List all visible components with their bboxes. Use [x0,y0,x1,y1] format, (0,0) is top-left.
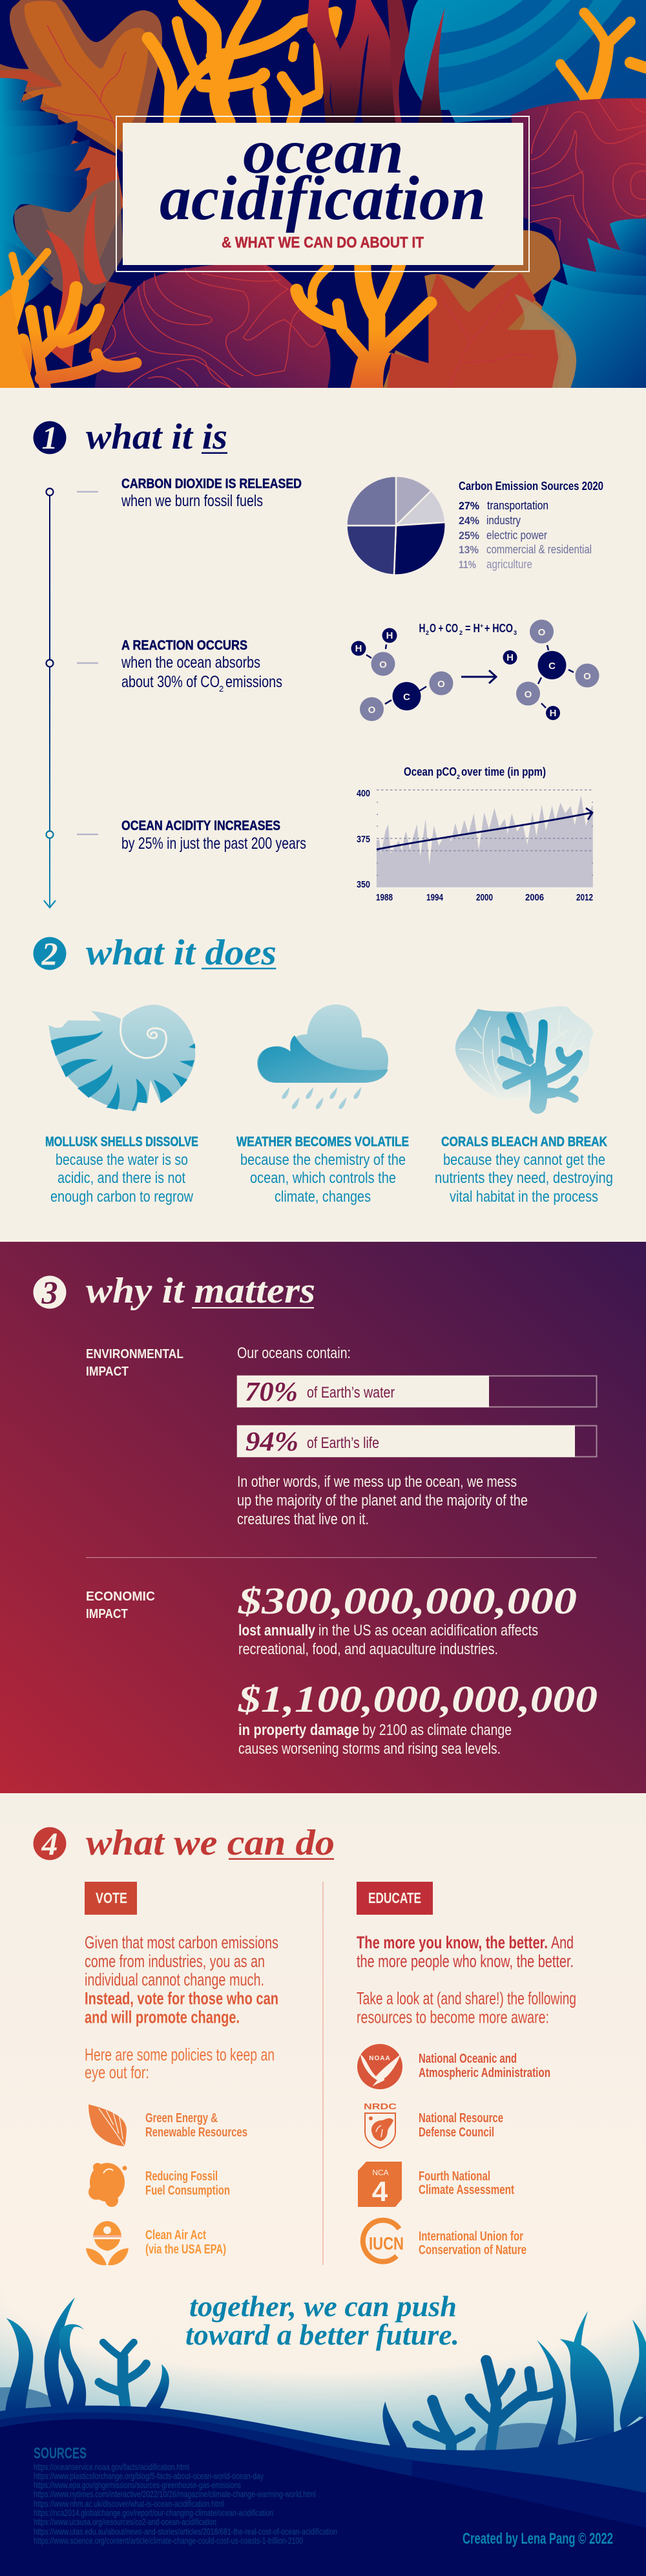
section 3 panel: why it matters [0,1242,646,1793]
bar: 70% of Earth's water: 70% [245,1378,298,1407]
resource: NCA: Fourth National [419,2169,490,2184]
vote paragraph: eye out for: [85,2063,149,2082]
molecules diagram: O [538,627,546,638]
resource: NOAA [419,2052,550,2080]
step 1 text: CARBON DIOXIDE IS RELEASED [121,476,302,491]
right seagrass [382,2311,646,2450]
icon: NCA4 logo [358,2162,402,2208]
bar: 70% of Earth's water: of Earth’s water [307,1384,395,1401]
sources: https://www.epa.gov/ghgemissions/sources-greenhouse-gas-emissions [34,2480,241,2490]
sources: https://www.ucsusa.org/resources/co2-and-ocean-acidification [34,2517,216,2527]
educate paragraph: resources to become more aware: [357,2008,549,2027]
sources: SOURCES [34,2445,87,2462]
bar: 70% of Earth's water [237,1376,597,1407]
column: mollusk shells text [45,1134,198,1206]
step 2 text: about 30% of CO [121,673,220,691]
molecules diagram: H [550,708,556,719]
seafloor waves [0,2405,646,2576]
policy: green energy [145,2111,247,2140]
chart title: Ocean pCO [404,765,457,778]
policy: fossil fuel: Fuel Consumption [145,2184,230,2198]
molecules diagram: C [548,661,556,672]
column: mollusk shells text: acidic, and there is not [57,1169,185,1187]
sources: https://www.utas.edu.au/about/news-and-stories/articles/2018/681-the-real-cost-of-ocean-acidification [34,2526,337,2537]
paragraph [237,1473,528,1528]
icon: NCA4 logo: NCA [372,2168,389,2177]
icon: NOAA logo [357,2044,402,2089]
icon: rain cloud [257,1005,388,1109]
pie chart: carbon emission sources [346,476,446,575]
heading text: what it is [86,417,227,457]
axis labels: 1988 [376,892,393,903]
left coral [99,2342,146,2409]
environmental label [86,1347,183,1379]
sources: https://www.plasticsforchange.org/blog/5-facts-about-ocean-world-ocean-day [34,2471,264,2481]
policy: clean air act: Clean Air Act [145,2228,206,2242]
sources: https://oceanservice.noaa.gov/facts/acidification.html [34,2462,189,2472]
number badge: 4 [41,1826,58,1862]
title line 2: acidification [160,164,486,233]
subtitle: & WHAT WE CAN DO ABOUT IT [222,234,424,251]
economic label [86,1590,155,1621]
top-left coral leaf [0,0,162,281]
resource: NRDC: National Resource [419,2111,503,2125]
educate paragraph: And [551,1933,574,1952]
axis labels [357,788,593,903]
column: mollusk shells text: because the water is so [56,1151,188,1169]
paragraph: up the majority of the planet and the majority of the [237,1492,528,1509]
molecules diagram: H [506,652,514,663]
hero illustration [0,0,646,388]
policy: clean air act [145,2228,226,2257]
molecules diagram: O [379,659,387,670]
stat: 1.1 trillion: in property damage [238,1721,359,1739]
our oceans contain: Our oceans contain: [237,1345,351,1362]
closing statement: together, we can push [189,2290,457,2323]
molecules diagram: O [583,671,591,682]
column: corals text [435,1134,613,1206]
resource: NRDC: Defense Council [419,2125,494,2140]
outer white frame [116,116,529,271]
step 2 text: A REACTION OCCURS [121,638,247,653]
reaction equation [419,622,517,636]
column: corals text: because they cannot get the [443,1151,605,1169]
area [377,795,593,888]
resource: NCA: Climate Assessment [419,2183,514,2197]
axis labels: 400 [357,788,370,799]
reaction equation: + HCO [484,622,513,635]
economic label: ECONOMIC [86,1590,155,1604]
icon: NRDC logo [364,2102,397,2148]
stat: 300 billion: in the US as ocean acidification affects [318,1622,538,1639]
vote paragraph: Instead, vote for those who can [85,1988,278,2008]
section 3 heading: why it matters [86,1271,315,1311]
pie legend: electric power [486,529,547,542]
number badge: 2 [41,935,58,972]
axis labels: 375 [357,834,370,845]
leaf veins [41,26,126,128]
molecules diagram: H [386,630,393,641]
vote paragraph [85,1933,278,2082]
pie legend: 13% [459,544,479,556]
chart title: 2 [457,774,460,780]
stat: 1.1 trillion [238,1678,598,1758]
environmental label: IMPACT [86,1365,129,1379]
arrow [461,670,496,683]
pie legend: Carbon Emission Sources 2020 [459,480,603,493]
vote paragraph: Here are some policies to keep an [85,2045,275,2065]
bar: 94% of Earth's life: of Earth’s life [307,1434,379,1452]
timeline [44,489,98,908]
pie legend: 24% [459,515,479,527]
stat: 300 billion [238,1580,577,1658]
vote paragraph: come from industries, you as an [85,1952,265,1971]
number badge [34,935,66,972]
educate label: EDUCATE [368,1889,421,1906]
stat: 300 billion: recreational, food, and aquaculture industries. [238,1641,498,1658]
column: weather text [236,1134,409,1206]
gridlines [377,790,593,875]
molecules diagram: O [437,679,445,690]
step 3 text [121,818,306,853]
molecules diagram: O [368,705,376,716]
stat: 1.1 trillion: causes worsening storms and rising sea levels. [238,1740,501,1758]
title card [116,116,529,271]
reaction equation: 2 [426,630,429,636]
column: mollusk shells text: MOLLUSK SHELLS DISSOLVE [45,1134,198,1149]
left blue kelp layers [0,78,90,317]
educate paragraph: The more you know, the better. [357,1933,548,1952]
policy: green energy: Green Energy & [145,2111,218,2125]
axis labels: 2012 [576,892,593,903]
top orange coral [149,0,336,123]
axis labels: 1994 [426,892,444,903]
card background [123,123,523,265]
bottom-centre coral [297,263,431,388]
educate label [357,1882,433,1915]
right corals [417,2361,556,2452]
vote label: VOTE [96,1889,127,1906]
reaction equation: O + CO [430,622,458,635]
section 2 heading [34,933,276,973]
resource: IUCN: International Union for [419,2230,523,2244]
number badge [34,1826,66,1862]
stat: 1.1 trillion: by 2100 as climate change [362,1721,512,1739]
icon: IUCN logo [363,2220,404,2262]
column: weather text: climate, changes [275,1188,371,1206]
chart: ocean pCO2 over time [357,765,593,903]
step 1 text [121,476,302,510]
stat: 1.1 trillion: $1,100,000,000,000 [238,1678,598,1720]
axis labels: 350 [357,879,370,890]
section 4 heading [34,1823,335,1863]
pie legend: 27% [459,500,479,512]
axis labels: 2006 [525,892,544,903]
reaction equation: = H [465,622,480,635]
educate paragraph: the more people who know, the better. [357,1952,574,1971]
title line 1: ocean [243,117,404,187]
resource: IUCN: Conservation of Nature [419,2243,526,2257]
reaction equation: H [419,622,425,635]
column: mollusk shells text: enough carbon to regrow [50,1188,194,1206]
column divider [322,1882,324,2265]
sources: https://www.nytimes.com/interactive/2022/10/26/magazine/climate-change-warming-world.html [34,2489,316,2499]
educate paragraph [357,1933,576,2027]
economic label: IMPACT [86,1607,128,1621]
number badge [34,420,66,456]
pie legend: 11% [459,559,476,571]
column: weather text: WEATHER BECOMES VOLATILE [236,1134,409,1149]
policy: fossil fuel [145,2169,230,2198]
step 2 text: emissions [225,673,282,691]
bar: 94% of Earth's life [237,1425,597,1457]
step 1 text: when we burn fossil fuels [121,492,263,510]
vote paragraph: Given that most carbon emissions [85,1933,278,1952]
paragraph: In other words, if we mess up the ocean, we mess [237,1473,517,1491]
bottom-left red seaweed [45,193,132,368]
icon: NCA4 logo: 4 [372,2176,388,2208]
step 2 text [121,638,282,694]
bottom-left dark leaf [14,179,123,307]
molecules diagram [351,619,599,721]
step 3 text: OCEAN ACIDITY INCREASES [121,818,280,833]
pie legend: agriculture [486,558,532,571]
pie legend: transportation [487,499,548,512]
rocks [0,2387,577,2456]
pie legend: 25% [459,529,479,542]
reaction equation: 3 [514,630,517,636]
axis labels: 2000 [476,892,493,903]
trend arrow [377,808,592,849]
pie legend [459,480,603,571]
column: corals text: nutrients they need, destroying [435,1169,613,1187]
bottom-right blue kelp [540,218,646,388]
molecules diagram: C [403,692,410,703]
policy: green energy: Renewable Resources [145,2125,247,2140]
reaction equation: + [480,623,483,629]
heading text: what it does [86,933,276,973]
chart title: over time (in ppm) [461,765,546,778]
column: corals text: CORALS BLEACH AND BREAK [441,1134,607,1149]
paragraph: creatures that live on it. [237,1511,369,1528]
icon: leaf [89,2104,127,2146]
column: weather text: because the chemistry of the [240,1151,406,1169]
stat: 300 billion: lost annually [238,1622,316,1639]
step 2 text: when the ocean absorbs [121,654,260,672]
icon: fossil fuel droplets [89,2163,127,2207]
icon: clean air flower [86,2221,129,2265]
icon: NOAA logo: NOAA [369,2055,391,2062]
right red mound [511,98,646,286]
column: corals text: vital habitat in the process [450,1188,598,1206]
closing statement: toward a better future. [185,2318,459,2351]
bottom-left coral [4,252,136,388]
icon: IUCN logo: IUCN [369,2233,404,2253]
pie legend: commercial & residential [486,543,592,556]
left seagrass [5,2297,169,2416]
icon: mollusk shell [48,1005,195,1111]
vote paragraph: and will promote change. [85,2008,240,2027]
heading text: what we can do [86,1823,335,1863]
section 3 heading: 3 [41,1274,58,1310]
seafloor illustration [0,2297,646,2576]
bottom-right orange leaf [383,230,580,388]
section 1 heading [34,417,227,457]
resource: IUCN [419,2230,526,2257]
icon: bleached coral [455,1006,593,1105]
sources: https://www.science.org/content/article/climate-change-could-cost-us-coasts-1-trillion-2100 [34,2535,303,2546]
policy: fossil fuel: Reducing Fossil [145,2169,218,2184]
sources [34,2445,337,2546]
molecules diagram: H [355,643,362,654]
resource: NOAA: Atmospheric Administration [419,2066,550,2080]
column: weather text: ocean, which controls the [250,1169,396,1187]
resource: NRDC [419,2111,503,2140]
top-right coral [560,13,646,100]
environmental label: ENVIRONMENTAL [86,1347,183,1361]
bar: 94% of Earth's life: 94% [245,1427,298,1457]
top-right blue kelp [404,0,646,123]
icon: NRDC logo: NRDC [364,2102,397,2111]
chart title [404,765,546,780]
vote paragraph: individual cannot change much. [85,1970,264,1990]
section 4 background [0,1793,646,2456]
step 2 text: 2 [219,684,224,694]
vote label [85,1882,137,1915]
resource: NOAA: National Oceanic and [419,2052,517,2066]
sources: https://nca2014.globalchange.gov/report/our-changing-climate/ocean-acidification [34,2507,273,2518]
reaction equation: 2 [459,630,463,636]
molecules diagram: O [525,689,532,700]
resource: NCA [419,2169,514,2197]
policy: clean air act: (via the USA EPA) [145,2242,226,2257]
number badge: 1 [41,420,58,456]
sources: https://www.nhm.ac.uk/discover/what-is-ocean-acidification.html [34,2498,224,2509]
step 3 text: by 25% in just the past 200 years [121,835,306,853]
stat: 300 billion: $300,000,000,000 [238,1580,577,1622]
closing statement [185,2290,459,2351]
pie legend: industry [486,514,521,527]
bottom red mound [95,263,331,388]
red seaweed [307,0,412,123]
